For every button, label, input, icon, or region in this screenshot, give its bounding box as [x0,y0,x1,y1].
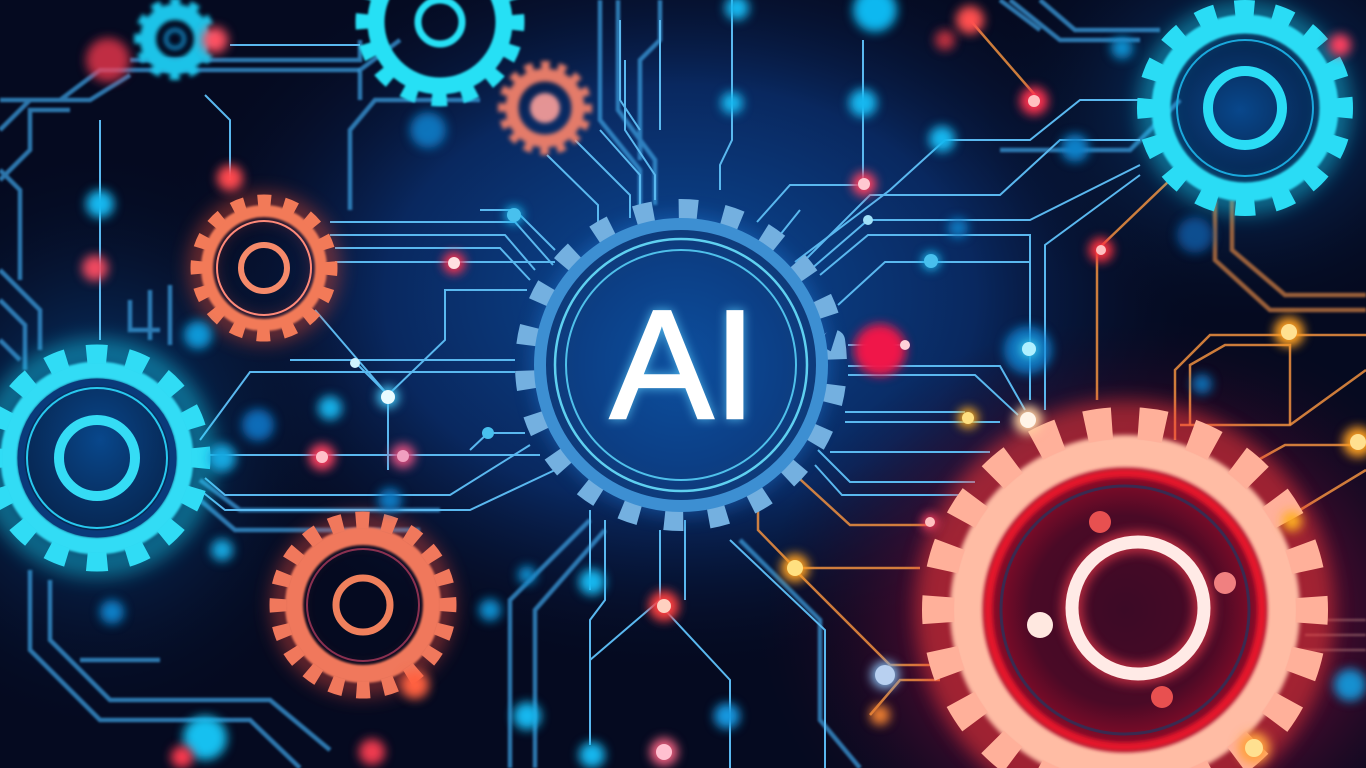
gear: small pink top [499,62,591,154]
gear: cyan left [0,344,211,572]
circuit traces: sharp blue layer [100,0,1140,768]
node cores [316,95,1366,760]
gear: cyan top right [1137,0,1353,216]
central gear glow [531,215,831,515]
gear: orange lower left [272,514,454,696]
AI title: AI [610,278,756,451]
gear: small cyan top left [135,0,215,79]
circuit traces: orange layer [758,20,1366,715]
gear: red left [191,195,337,341]
gear: large red lower right [925,410,1325,768]
gear: cyan top middle [357,0,523,105]
central gear teeth [504,188,858,542]
central gear rim [540,224,822,506]
AI glow: AI [610,278,756,451]
gear: central AI gear [504,188,858,542]
